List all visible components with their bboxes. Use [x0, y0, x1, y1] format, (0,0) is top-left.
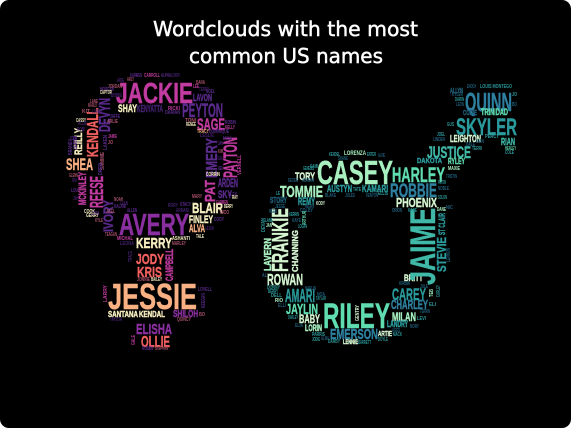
small filler names: female: JERRI [73, 135, 79, 150]
name: Jaime: JAIME [404, 208, 443, 285]
small filler names: female: ARMANI [176, 208, 189, 214]
small filler names: male: REGAN [305, 204, 314, 210]
name: Justice: JUSTICE [427, 143, 471, 162]
small filler names: female: TERRY [199, 87, 209, 93]
small filler names: female: LOVELL [198, 287, 212, 293]
small filler names: male: KACE [408, 208, 417, 214]
small filler names: female: TAYLOR [110, 317, 122, 323]
small filler names: male: ARTHUR [302, 211, 308, 225]
small filler names: female: BERRY [224, 204, 233, 210]
small filler names: female: BO [199, 312, 205, 318]
small filler names: male: MAXIE [448, 166, 460, 172]
name: Emery: EMERY [204, 138, 221, 178]
name: Ryley: RYLEY [448, 157, 465, 166]
small filler names: male: TAYLAR [316, 296, 326, 302]
small filler names: female: LEAN [120, 201, 128, 207]
small filler names: male: KENDEL [329, 152, 340, 158]
small filler names: female: LOU [71, 188, 78, 194]
small filler names: male: GUS [447, 122, 454, 128]
name: Jody: JODY [136, 251, 164, 268]
small filler names: female: NOEL [206, 89, 215, 95]
small filler names: female: BAILEY [151, 277, 162, 283]
name: Ollie: OLLIE [141, 334, 170, 351]
small filler names: male: ALVIE [378, 153, 385, 159]
small filler names: female: RICKI [168, 106, 181, 112]
small filler names: female: STACY [180, 202, 191, 208]
name: Rian: RIAN [501, 137, 515, 148]
small filler names: female: NICO [220, 210, 229, 216]
small filler names: female: GLENN [69, 173, 78, 179]
name: Allyn: ALLYN [450, 88, 463, 95]
name: Dakota: DAKOTA [417, 158, 442, 165]
wordcloud: female symbol: KENYATTA [137, 104, 163, 115]
name: Leighton: LEIGHTON [450, 134, 481, 145]
small filler names: male: DELL [271, 293, 282, 299]
small filler names: male: SOLON [438, 195, 447, 201]
small filler names: female: RUBEN [142, 346, 153, 352]
title: common US names [189, 44, 383, 68]
small filler names: female: KIT [82, 109, 90, 115]
name: Quinn: QUINN [465, 87, 512, 117]
name: Pat: PAT [202, 180, 219, 202]
small filler names: male: JULE [420, 284, 428, 290]
small filler names: male: ORION [392, 208, 402, 214]
small filler names: male: ELLIS [378, 191, 388, 197]
small filler names: female: MARLO [88, 103, 97, 109]
name: Phoenix: PHOENIX [396, 195, 437, 210]
small filler names: female: KYLE [95, 218, 103, 224]
small filler names: female: BOBBIE [111, 93, 122, 99]
name: Tory: TORY [295, 171, 315, 183]
small filler names: female: JONNIE [137, 277, 150, 283]
small filler names: female: CORRIN [206, 172, 220, 178]
small filler names: female: RAY [232, 195, 238, 201]
small filler names: male: LORENZA [344, 151, 367, 157]
small filler names: female: JAN [218, 141, 223, 147]
name: Tommie: TOMMIE [280, 184, 323, 201]
small filler names: female: DANA [196, 80, 205, 86]
small filler names: male: DALE [466, 142, 475, 148]
name: Jessie: JESSIE [108, 276, 197, 317]
small filler names: female: TEAGAN [105, 232, 117, 238]
name: Story: STORY [270, 196, 287, 205]
name: Alva: ALVA [189, 223, 205, 235]
name: Avery: AVERY [119, 207, 189, 242]
small filler names: male: NOBLE [438, 186, 449, 192]
small filler names: male: SHANE [338, 156, 348, 162]
small filler names: female: TONI [185, 118, 197, 124]
small filler names: male: CARLEY [436, 285, 442, 297]
small filler names: male: PERCY [485, 134, 500, 140]
name: Robbie: ROBBIE [390, 181, 437, 202]
small filler names: male: PAXTON [438, 180, 446, 186]
name: Santana: SANTANA [108, 310, 138, 319]
small filler names: female: CODY [214, 217, 224, 223]
wordcloud: male symbol [261, 84, 517, 346]
name: Sky: SKY [218, 189, 232, 201]
name: Rowan: ROWAN [267, 272, 303, 289]
small filler names: female: TRACE [128, 251, 134, 262]
name: Carey: CAREY [392, 285, 426, 304]
small filler names: male: TERRI [472, 146, 482, 152]
small filler names: male: COLBY [300, 208, 313, 214]
small filler names: female: DREW [98, 163, 104, 175]
name: Frankie: FRANKIE [267, 208, 293, 272]
small filler names: female: ROBIN [225, 120, 236, 126]
small filler names: male: DEVAN [261, 218, 267, 232]
name: Jackie: JACKIE [116, 78, 193, 110]
name: Artie: ARTIE [378, 331, 392, 338]
name: Amari: AMARI [285, 286, 315, 306]
name: Shiloh: SHILOH [173, 309, 198, 320]
small filler names: male: TEB [429, 289, 435, 297]
small filler names: male: JOEL [437, 132, 445, 138]
name: Baby: BABY [299, 312, 320, 326]
name: Codie: CODIE [463, 110, 477, 117]
name: Kendal: KENDAL [139, 310, 165, 319]
name: Campbell: CAMPBELL [164, 249, 176, 281]
small filler names: male: SAMI [310, 164, 318, 170]
small filler names: female: TRACY [197, 129, 209, 135]
small filler names: male: BERRY [268, 289, 278, 295]
name: Britt: BRITT [404, 273, 423, 283]
small filler names: male: KODY [316, 201, 325, 207]
name: Lorin: LORIN [305, 323, 322, 333]
small filler names: male: DARIN [455, 97, 464, 103]
small filler names: male: BO [512, 102, 517, 108]
small filler names: male: TERRIN [420, 309, 430, 315]
title [153, 17, 418, 68]
name: Skyler: SKYLER [456, 114, 517, 141]
small filler names: male: MACK [393, 332, 402, 338]
name: Lavon: LAVON [193, 93, 212, 104]
small filler names: female: EDEN [70, 136, 77, 142]
small filler names: female: LANE [90, 99, 98, 105]
small filler names: male: AGES [392, 328, 400, 334]
name: Peyton: PEYTON [182, 101, 223, 122]
small filler names: male: DOYLE [378, 337, 388, 343]
small filler names: female: GALE [131, 335, 137, 345]
small filler names: female: DOMINIQUE [209, 129, 229, 135]
small filler names: female: DARIAN [165, 110, 180, 116]
small filler names: female: CARROLL [144, 73, 160, 79]
name: Channing: CHANNING [291, 230, 300, 272]
small filler names: male: LE [276, 191, 280, 197]
name: Kerry: KERRY [136, 235, 172, 252]
name: Devyn: DEVYN [97, 98, 114, 132]
wordcloud: female symbol: ARDEN [218, 176, 238, 190]
name: McKinley: MCKINLEY [77, 172, 89, 205]
small filler names: female: ROBI [77, 127, 85, 133]
wordcloud: female symbol [66, 73, 243, 352]
small filler names: male: NORY [410, 324, 419, 330]
small filler names: female: GERRY [86, 213, 99, 219]
small filler names: female: QUINCY [177, 317, 191, 323]
small filler names: male: KYLER [452, 92, 463, 98]
small filler names: male: LINDEN [433, 137, 445, 143]
small filler names: male: ELI [429, 302, 437, 308]
small filler names: female: CAPTOR [100, 90, 112, 96]
name: Stevie: STEVIE [434, 237, 449, 272]
name: Milan: MILAN [392, 310, 416, 324]
small filler names: female: RENEE [186, 122, 196, 128]
small filler names: male: KAYE [292, 218, 301, 224]
name: Lennie: LENNIE [343, 339, 358, 346]
name: Austyn: AUSTYN [327, 184, 352, 195]
small filler names: female: ALPHA [161, 73, 171, 79]
small filler names: male: LEVI [417, 316, 426, 322]
small filler names: male: LOUIS MONTEGO [480, 84, 512, 90]
small filler names: male: HENLEY [505, 146, 516, 152]
small filler names: female: KALANI [114, 204, 126, 210]
name: Reese: REESE [87, 176, 107, 208]
name: Payton: PAYTON [221, 137, 242, 178]
small filler names: male: KERRIN [289, 212, 299, 218]
small filler names: female: LAKEN [103, 135, 109, 150]
small filler names: female [68, 73, 243, 352]
small filler names: female: COOK [84, 209, 95, 215]
small filler names: male: AL [262, 273, 267, 279]
small filler names: male: KENYON [366, 193, 378, 199]
small filler names: male: DANE [437, 207, 446, 213]
small filler names: male: DEVEN [288, 178, 298, 184]
small filler names: male: NOA [317, 292, 325, 298]
small filler names: female: LOREN [92, 109, 102, 115]
name: Reilly: REILLY [73, 128, 85, 155]
small filler names: female: LEIGH [205, 226, 214, 232]
small filler names: female: TALE [196, 234, 204, 240]
small filler names: female: CASSY [76, 118, 86, 124]
small filler names: male: ENTER [367, 152, 376, 158]
small filler names: male: MARLIN [305, 286, 316, 292]
small filler names: male: LOGAN [298, 224, 307, 230]
small filler names: female: LESLIE [200, 133, 215, 139]
name: Charley: CHARLEY [391, 297, 428, 312]
small filler names: female: JAFFE [110, 114, 120, 120]
small filler names: female: LEE [193, 84, 199, 90]
name: Harley: HARLEY [392, 164, 445, 187]
small filler names: female: MARLEY [172, 241, 186, 247]
small filler names: male: JULES [345, 193, 355, 199]
small filler names: male: BARRETT [358, 340, 371, 346]
name: Ivory: IVORY [100, 200, 116, 232]
name: St Clair: ST CLAIR [437, 213, 447, 235]
small filler names: male: COLE [505, 150, 514, 156]
small filler names: female: VERNELL [237, 155, 243, 175]
small filler names: female: ARIE [117, 78, 124, 84]
small filler names: female: MICHAL [117, 236, 133, 242]
name: Kendall: KENDALL [85, 108, 102, 157]
name: Finley: FINLEY [189, 214, 213, 226]
small filler names: female: STEPHAN [155, 346, 168, 352]
small filler names: male: LANE [265, 218, 273, 224]
small filler names: male: DARBY [328, 339, 340, 345]
small filler names: male: TATE [353, 187, 361, 193]
name: Casey: CASEY [317, 154, 393, 191]
small filler names: male: KIRBIN [399, 281, 410, 287]
small filler names: female: ALLIE [78, 121, 87, 127]
name: Shea: SHEA [66, 155, 93, 174]
small filler names: female: KARMEN [130, 73, 142, 79]
small filler names: female: JO [108, 140, 113, 146]
small filler names: male: ENOCH [467, 84, 476, 90]
name: Elisha: ELISHA [136, 321, 172, 338]
small filler names: male: BLAKE [325, 193, 336, 199]
small filler names: female: LEONA [120, 241, 134, 247]
small filler names: female: ALEX [228, 192, 237, 198]
name: Riley: RILEY [323, 297, 390, 336]
small filler names: female: GAIL [218, 156, 223, 162]
small filler names: female: REX [218, 166, 223, 172]
small filler names: female: ALLEN [127, 208, 137, 214]
name: Sage: SAGE [197, 115, 225, 134]
small filler names: female: MARY [192, 194, 202, 200]
small filler names: female: KELLY [225, 125, 235, 131]
small filler names: female: MORGAN [100, 87, 114, 93]
name: Blair: BLAIR [192, 200, 223, 217]
small filler names: male: JO [512, 92, 517, 98]
small filler names: female: LARRY [103, 284, 109, 302]
small filler names: female: NOAH [114, 197, 123, 203]
small filler names: male: ADRIAN [302, 178, 314, 184]
small filler names: male: NIC [446, 205, 453, 211]
name: Emerson: EMERSON [330, 326, 378, 343]
small filler names: male: ALMA [321, 336, 329, 342]
small filler names: male: TRISTIN [446, 174, 457, 180]
name: Landry: LANDRY [387, 319, 408, 329]
small filler names: female: BRANDY [68, 139, 74, 155]
small filler names: female: JAY [73, 196, 79, 202]
title: Wordclouds with the most [153, 17, 418, 41]
small filler names: female: KIM [218, 149, 223, 155]
small filler names: female: JAMIE [108, 134, 117, 140]
small filler names: female: MICA [223, 136, 232, 142]
name: Lavern: LAVERN [263, 238, 274, 271]
small filler names: female: IRA [72, 178, 77, 184]
name: Trinidad: TRINIDAD [481, 107, 508, 117]
small filler names: female: LYN [92, 211, 99, 217]
small filler names: female: KEEGAN [201, 293, 207, 308]
small filler names: male [261, 84, 517, 346]
small filler names: female: ASHANTI [172, 236, 190, 242]
small filler names: female: ARLY [127, 77, 134, 83]
small filler names: male: ELIA [295, 323, 303, 329]
small filler names: male: LEON [456, 102, 464, 108]
small filler names: female: JAEL [106, 209, 115, 215]
name: Shay: SHAY [118, 103, 137, 115]
small filler names: male: OAKLEY [288, 315, 298, 321]
name: Kamari: KAMARI [362, 184, 388, 195]
small filler names: male: LENNON [446, 248, 452, 262]
small filler names: female: SAMMIE [100, 151, 106, 170]
name: Remy: REMY [298, 196, 315, 208]
small filler names: female: LOWRY [171, 73, 180, 79]
small filler names: male: JODIE [312, 337, 320, 343]
small filler names: female: CARMEN [216, 200, 228, 206]
small filler names: male: JESSE [275, 204, 285, 210]
small filler names: male: DONNY [267, 285, 280, 291]
small filler names: female: ARLIE [107, 119, 118, 125]
small filler names: male: GENTRY [355, 304, 361, 321]
name: Kris: KRIS [137, 264, 162, 281]
small filler names: male: ELLI [278, 303, 286, 309]
small filler names: male: REED [269, 209, 277, 215]
small filler names: male: RIO [275, 298, 283, 304]
small filler names: male: PARRIS [312, 332, 325, 338]
small filler names: male: GENESIS [303, 166, 314, 172]
name: Jaylin: JAYLIN [286, 301, 318, 318]
small filler names: male: JAN [266, 223, 272, 229]
small filler names: female: RORY [168, 203, 178, 209]
small filler names: male: IVAN [476, 139, 484, 145]
small filler names: female: JORDAN [108, 84, 122, 90]
